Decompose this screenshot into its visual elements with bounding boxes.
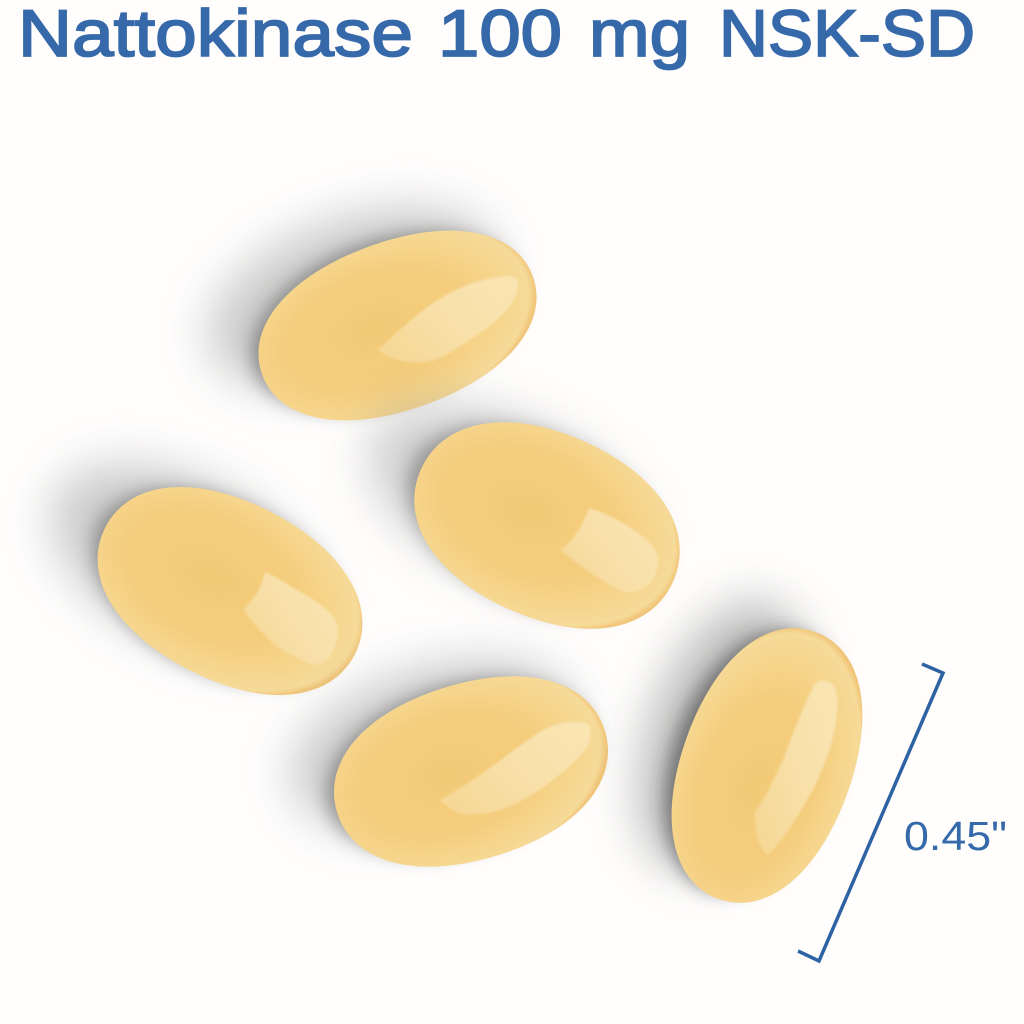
capsule 5 bbox=[606, 579, 895, 928]
capsule 2 bbox=[341, 368, 710, 666]
capsule 4 bbox=[271, 630, 631, 897]
size bracket bbox=[798, 664, 943, 961]
capsule 1 bbox=[184, 173, 562, 454]
capsule 3 bbox=[20, 425, 395, 734]
title bbox=[18, 0, 975, 70]
size label: 0.45" bbox=[904, 813, 1007, 859]
